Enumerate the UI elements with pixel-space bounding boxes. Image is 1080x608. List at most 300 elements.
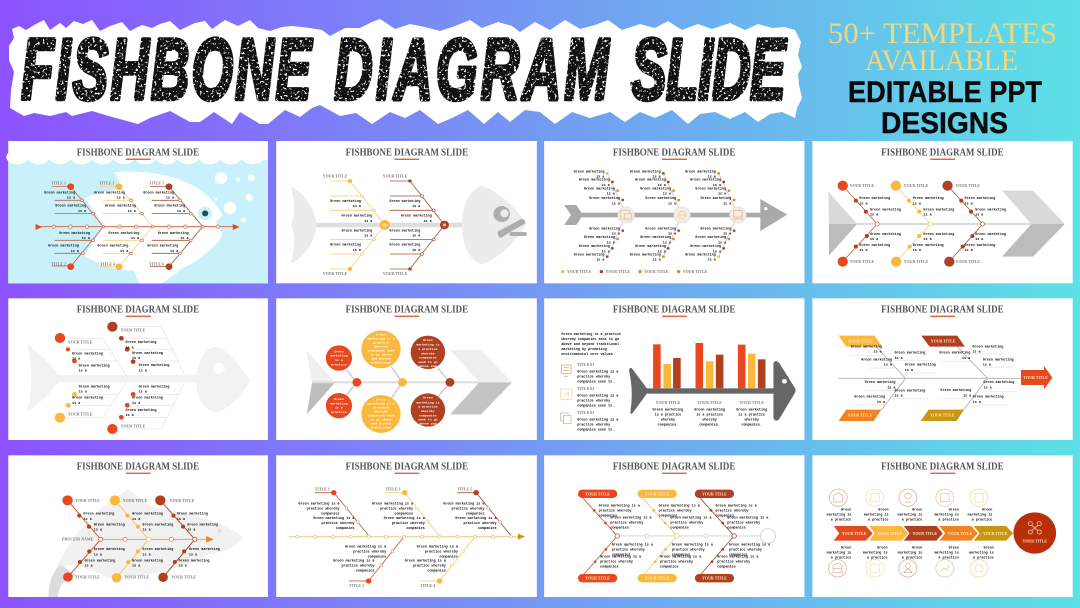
labels: TITLE 6 xyxy=(149,262,164,266)
labels: is a xyxy=(132,401,140,406)
circle: brown bottom: above and xyxy=(419,422,437,426)
labels: is a xyxy=(126,345,134,350)
labels: is a xyxy=(139,390,147,395)
labels: is a xyxy=(132,564,140,569)
bones xyxy=(606,172,738,258)
spine and bones xyxy=(36,183,240,270)
parallelogram tags: YOUR TITLE xyxy=(930,414,955,418)
labels: is a xyxy=(601,183,610,188)
labels: TITLE 5 xyxy=(149,182,164,186)
labels: Green marketing xyxy=(635,178,666,183)
labels: Green marketing xyxy=(690,244,721,249)
labels: practice whereby xyxy=(660,560,693,565)
promo text xyxy=(828,17,1057,140)
promo text: AVAILABLE xyxy=(865,44,1018,77)
bar captions: Green marketing xyxy=(652,408,683,413)
legend xyxy=(561,270,708,274)
labels: Green marketing xyxy=(72,352,103,357)
chevrons: YOUR TITLE xyxy=(983,532,1008,536)
labels: is a xyxy=(972,349,981,354)
circle: brown bottom: companies xyxy=(419,413,437,417)
circle: red bottom: marketing xyxy=(330,401,348,405)
spine and bones xyxy=(289,490,525,584)
pill tags: YOUR TITLE xyxy=(585,577,610,581)
panel: grey fish xyxy=(276,141,537,283)
labels: is a xyxy=(179,564,187,569)
labels: is a xyxy=(67,196,75,201)
labels: companies xyxy=(670,525,689,530)
bones xyxy=(330,179,449,271)
labels: Green marketing is a xyxy=(372,502,413,507)
labels: is a xyxy=(663,192,671,197)
labels: Green marketing is a xyxy=(405,559,446,564)
labels: Green marketing xyxy=(132,351,163,356)
labels: YOUR TITLE xyxy=(75,576,100,580)
labels: Green marketing xyxy=(640,186,671,191)
labels: practice whereby xyxy=(672,548,705,553)
icon list: Green marketing is a xyxy=(577,418,618,423)
labels: YOUR TITLE xyxy=(850,184,875,188)
title: FISHBONE DIAGRAM SLIDE xyxy=(346,305,468,316)
labels: is a xyxy=(142,528,151,533)
labels: Green marketing xyxy=(940,388,971,393)
labels: Green marketing xyxy=(700,227,731,232)
panel: chevron process xyxy=(812,455,1073,597)
bottom text xyxy=(827,546,994,560)
parallelogram tags: YOUR TITLE xyxy=(931,340,956,344)
labels: Green marketing xyxy=(861,357,892,362)
labels: Green marketing xyxy=(72,396,103,401)
labels: TITLE 3 xyxy=(99,182,114,186)
bar captions: is a practice xyxy=(696,413,723,418)
labels: Green marketing xyxy=(142,547,173,552)
labels: Green marketing is a xyxy=(384,516,425,521)
labels: TITLE 1 xyxy=(51,182,66,186)
circle: yellow bottom: and beyond xyxy=(371,421,391,425)
circle: yellow top: to go above xyxy=(370,353,392,357)
labels: Green marketing xyxy=(94,547,125,552)
bottom text: a practice xyxy=(973,555,994,560)
labels: is a xyxy=(894,393,903,398)
labels: is a xyxy=(870,212,878,217)
top text: Green xyxy=(841,508,851,512)
labels: YOUR TITLE xyxy=(75,499,100,503)
bar captions: YOUR TITLE xyxy=(697,401,722,405)
labels: is a xyxy=(131,236,139,241)
labels: companies xyxy=(466,512,484,517)
labels: is a xyxy=(975,237,983,242)
labels: companies xyxy=(727,525,746,530)
title underline xyxy=(394,473,419,474)
circle: yellow top: Green xyxy=(376,333,386,337)
labels: Green marketing xyxy=(973,395,1004,400)
labels: practice whereby xyxy=(322,521,354,526)
bottom icons xyxy=(829,560,988,577)
labels: Green marketing is a xyxy=(659,503,700,508)
labels: Green marketing xyxy=(139,385,170,390)
labels: YOUR TITLE xyxy=(323,174,348,178)
icon list: Green marketing is a xyxy=(577,370,618,375)
labels: is a xyxy=(120,249,128,254)
title: FISHBONE DIAGRAM SLIDE xyxy=(881,148,1004,159)
labels: Green marketing xyxy=(154,204,185,209)
labels: Green marketing is a xyxy=(727,515,768,520)
circle: brown bottom: seek to go xyxy=(418,418,438,422)
labels: Green marketing xyxy=(108,231,139,236)
circle: yellow top: traditional xyxy=(370,361,392,365)
labels: is a xyxy=(652,257,661,262)
labels: companies xyxy=(478,526,497,531)
labels: is a xyxy=(658,183,666,188)
labels: Green marketing xyxy=(640,235,671,240)
legend: YOUR TITLE xyxy=(606,270,630,274)
labels: Green marketing xyxy=(923,232,954,237)
labels: Green marketing xyxy=(905,363,936,368)
labels: is a xyxy=(132,517,140,522)
labels: YOUR TITLE xyxy=(850,260,875,264)
pill tags: YOUR TITLE xyxy=(585,492,610,496)
bar captions: whereby xyxy=(661,418,675,423)
labels: Green marketing xyxy=(143,190,174,195)
bar captions: YOUR TITLE xyxy=(656,401,681,405)
labels: Green marketing xyxy=(865,380,895,385)
labels: Green marketing xyxy=(341,214,372,219)
circle: red top: marketing xyxy=(330,354,348,358)
circle: brown bottom: whereby xyxy=(421,409,435,413)
tail and head xyxy=(828,191,1065,257)
bar captions: whereby xyxy=(744,418,759,423)
labels: Green marketing is a xyxy=(717,555,758,560)
circle: brown bottom xyxy=(411,393,445,427)
tail and head xyxy=(306,350,512,414)
bar captions: is a practice xyxy=(655,413,681,418)
circle: brown top: whereby xyxy=(421,351,435,355)
labels: Green marketing xyxy=(695,186,726,191)
labels xyxy=(599,503,770,570)
intro paragraph xyxy=(561,332,621,357)
circle: red bottom xyxy=(326,393,352,418)
circle: red bottom: is a xyxy=(335,406,343,410)
labels xyxy=(323,174,432,276)
labels: YOUR TITLE xyxy=(171,576,196,580)
labels: Green marketing xyxy=(851,344,882,349)
labels: companies xyxy=(672,553,690,558)
labels: Green marketing is a xyxy=(716,503,757,508)
labels: is a xyxy=(79,390,87,395)
labels: Green marketing xyxy=(94,190,125,195)
numbered markers xyxy=(55,322,136,434)
bar captions: companies. xyxy=(741,423,762,428)
labels: Green marketing xyxy=(330,243,361,248)
labels: Green marketing xyxy=(158,231,189,236)
labels: Green marketing xyxy=(859,243,890,248)
labels: is a xyxy=(177,209,185,214)
labels: Green marketing is a xyxy=(599,503,640,508)
chevrons: YOUR TITLE xyxy=(913,532,937,536)
labels: is a xyxy=(973,400,981,405)
chevrons: YOUR TITLE xyxy=(877,532,902,536)
icon list: TITLE 03 xyxy=(577,411,594,415)
title underline xyxy=(662,316,687,317)
parallelogram tags xyxy=(839,336,965,421)
labels: Green marketing xyxy=(132,512,163,517)
labels: Green marketing xyxy=(401,214,432,219)
hub icons xyxy=(618,207,746,223)
bar captions: is a practice xyxy=(738,413,765,418)
circle: brown top: a practice xyxy=(418,347,438,351)
bubbles xyxy=(214,172,255,223)
circle: yellow bottom: traditional xyxy=(370,425,392,429)
labels: is a xyxy=(964,201,973,206)
arrow spine xyxy=(564,199,787,231)
labels: Green marketing xyxy=(635,244,666,249)
parallelogram tags: YOUR TITLE xyxy=(848,340,873,344)
labels: Green marketing xyxy=(964,243,995,248)
bones xyxy=(347,367,450,398)
labels: YOUR TITLE xyxy=(124,576,149,580)
legend: YOUR TITLE xyxy=(644,270,669,274)
labels: companies xyxy=(659,513,677,518)
labels: Green marketing xyxy=(700,196,731,201)
title: FISHBONE DIAGRAM SLIDE xyxy=(346,462,468,473)
pill tags: YOUR TITLE xyxy=(702,577,727,581)
icon list: practice whereby xyxy=(577,375,610,380)
labels: Green marketing xyxy=(975,232,1006,237)
labels: Green marketing xyxy=(975,207,1006,212)
title: FISHBONE DIAGRAM SLIDE xyxy=(613,148,735,159)
labels: is a xyxy=(983,385,992,390)
circle: brown bottom: Green xyxy=(423,396,433,400)
labels: Green marketing xyxy=(870,232,901,237)
labels: is a xyxy=(873,349,882,354)
labels: is a xyxy=(975,212,983,217)
labels: Green marketing is a xyxy=(443,502,484,507)
fish silhouette xyxy=(48,489,243,597)
labels: Green marketing xyxy=(189,547,220,552)
labels: Green marketing xyxy=(177,512,208,517)
banner heading: FISHBONE xyxy=(21,22,313,118)
labels: is a xyxy=(132,356,140,361)
circle: brown bottom: marketing is xyxy=(416,400,440,404)
chevrons: YOUR TITLE xyxy=(948,532,973,536)
fish silhouette xyxy=(291,186,527,264)
labels xyxy=(850,184,1006,264)
labels: is a xyxy=(718,192,726,197)
labels: YOUR TITLE xyxy=(121,424,146,428)
circle: yellow top: marketing is a xyxy=(367,337,395,341)
labels: TITLE 5 xyxy=(457,487,472,491)
labels: practice whereby xyxy=(342,564,374,569)
circle: red top xyxy=(326,345,352,371)
labels: Green marketing xyxy=(685,252,716,257)
icon list: TITLE 01 xyxy=(577,363,594,367)
labels: is a xyxy=(170,249,178,254)
labels: Green marketing xyxy=(79,385,110,390)
labels: Green marketing xyxy=(894,351,925,356)
labels: is a xyxy=(142,552,151,557)
labels: is a xyxy=(884,363,892,368)
circle: yellow top: companies seek xyxy=(367,349,395,353)
labels: YOUR TITLE xyxy=(955,260,980,264)
labels: is a xyxy=(913,248,921,253)
labels: YOUR TITLE xyxy=(68,413,93,417)
labels: practice whereby xyxy=(307,507,340,512)
intro paragraph: above and beyond traditional xyxy=(561,342,619,347)
labels: is a xyxy=(668,232,676,237)
circle: yellow top: and beyond xyxy=(371,357,391,361)
fish eye xyxy=(198,207,212,220)
labels: Green marketing xyxy=(630,169,661,174)
labels: Green marketing xyxy=(584,235,615,240)
bottom text: marketing is xyxy=(898,550,922,555)
slide grid xyxy=(6,141,1073,597)
labels: Green marketing xyxy=(341,228,372,233)
intro paragraph: whereby companies seek to go xyxy=(561,337,619,342)
labels: TITLE 1 xyxy=(315,487,330,491)
bottom text: marketing is xyxy=(934,550,959,555)
top text: marketing is xyxy=(864,512,889,517)
bottom text: Green xyxy=(877,546,888,550)
labels: YOUR TITLE xyxy=(121,329,146,333)
labels: practice whereby xyxy=(717,560,750,565)
labels: companies xyxy=(610,525,629,530)
labels: is a xyxy=(601,249,610,254)
icon list: companies seek to. xyxy=(577,428,614,433)
labels: Green marketing xyxy=(142,522,173,527)
top text: a practice xyxy=(938,517,959,522)
labels: practice whereby xyxy=(612,548,645,553)
labels: Green marketing is a xyxy=(612,543,653,548)
labels: Green marketing is a xyxy=(610,515,652,520)
promo text: DESIGNS xyxy=(881,107,1008,140)
labels: is a xyxy=(71,249,79,254)
top icons xyxy=(829,489,988,506)
labels: Green marketing xyxy=(84,558,115,563)
labels: is a xyxy=(877,400,885,405)
top text: Green xyxy=(949,508,959,512)
intro paragraph: environmental core values. xyxy=(561,352,615,357)
title underline xyxy=(662,159,687,160)
intro paragraph: Green marketing is a practice xyxy=(561,332,621,337)
labels: Green marketing xyxy=(579,244,610,249)
labels: is a xyxy=(964,248,973,253)
labels: Green marketing xyxy=(913,243,944,248)
chevrons xyxy=(834,526,1013,541)
panel: pill fishbone xyxy=(544,455,804,597)
labels: practice whereby xyxy=(413,564,446,569)
top text: Green xyxy=(878,508,889,512)
labels: YOUR TITLE xyxy=(383,174,408,178)
labels: Green marketing xyxy=(179,558,210,563)
labels: Green marketing xyxy=(79,364,110,369)
labels: Green marketing xyxy=(939,351,970,356)
panel: bar chart fish xyxy=(544,298,804,440)
labels: Green marketing is a xyxy=(298,502,340,507)
pill tags: YOUR TITLE xyxy=(645,577,670,581)
labels: Green marketing xyxy=(584,186,615,191)
labels: Green marketing xyxy=(574,169,604,174)
labels: is a xyxy=(668,201,676,206)
bottom text: Green xyxy=(983,546,994,550)
bottom text: marketing is xyxy=(827,550,851,555)
labels: is a xyxy=(83,517,92,522)
title: FISHBONE DIAGRAM SLIDE xyxy=(346,148,468,159)
labels: is a xyxy=(412,234,420,239)
top text: a practice xyxy=(831,517,851,522)
labels: Green marketing is a xyxy=(313,516,354,521)
labels: is a xyxy=(963,393,971,398)
labels: is a xyxy=(126,413,134,418)
circle: yellow bottom: to go above xyxy=(370,417,392,421)
icon list: Green marketing is a xyxy=(577,394,618,399)
labels: is a xyxy=(364,219,372,224)
labels: practice whereby xyxy=(600,560,633,565)
title: FISHBONE DIAGRAM SLIDE xyxy=(77,148,199,159)
labels: is a xyxy=(923,212,932,217)
labels: Green marketing xyxy=(389,243,420,248)
labels: Green marketing xyxy=(859,196,890,201)
labels: Green marketing xyxy=(685,169,716,174)
labels: Green marketing xyxy=(94,522,125,527)
promo text: EDITABLE PPT xyxy=(848,76,1042,109)
icon list xyxy=(561,363,618,433)
labels: TITLE 2 xyxy=(51,262,66,266)
labels: is a xyxy=(708,175,716,180)
labels: is a xyxy=(923,237,932,242)
panel: chevron fishbone xyxy=(812,141,1073,283)
labels: Green marketing is a xyxy=(345,544,386,549)
labels: companies xyxy=(729,553,747,558)
labels: Green marketing xyxy=(389,199,420,204)
labels: is a xyxy=(78,209,86,214)
title: FISHBONE DIAGRAM SLIDE xyxy=(613,305,735,316)
labels: Green marketing xyxy=(983,380,1014,385)
labels: Green marketing xyxy=(389,228,420,233)
labels: is a xyxy=(713,183,721,188)
labels: is a xyxy=(412,204,420,209)
title underline xyxy=(930,473,955,474)
labels: companies xyxy=(427,569,446,574)
labels: is a xyxy=(189,552,197,557)
labels: Green marketing is a xyxy=(600,555,641,560)
parallelogram tags: YOUR TITLE xyxy=(848,414,873,418)
labels: YOUR TITLE xyxy=(955,184,980,188)
labels: Green marketing xyxy=(854,395,885,400)
labels: is a xyxy=(983,363,991,368)
labels: companies xyxy=(356,569,374,574)
labels: is a xyxy=(187,528,195,533)
labels: practice whereby xyxy=(451,507,484,512)
labels: is a xyxy=(612,232,620,237)
circle: brown top xyxy=(411,336,445,369)
labels: companies xyxy=(336,526,354,531)
labels: Green marketing xyxy=(923,207,954,212)
main circle xyxy=(1013,512,1056,554)
labels: Green marketing is a xyxy=(672,543,713,548)
labels: practice whereby xyxy=(729,548,762,553)
labels: Green marketing xyxy=(105,204,136,209)
pill tags: YOUR TITLE xyxy=(645,492,670,496)
labels: is a xyxy=(94,528,102,533)
labels xyxy=(574,169,731,262)
labels: is a xyxy=(612,201,620,206)
labels: is a xyxy=(139,368,147,373)
labels: Green marketing xyxy=(574,252,604,257)
labels: practice whereby xyxy=(425,549,458,554)
bar captions: Green marketing xyxy=(736,408,767,413)
bones xyxy=(838,181,985,267)
spine and bones xyxy=(62,495,214,582)
